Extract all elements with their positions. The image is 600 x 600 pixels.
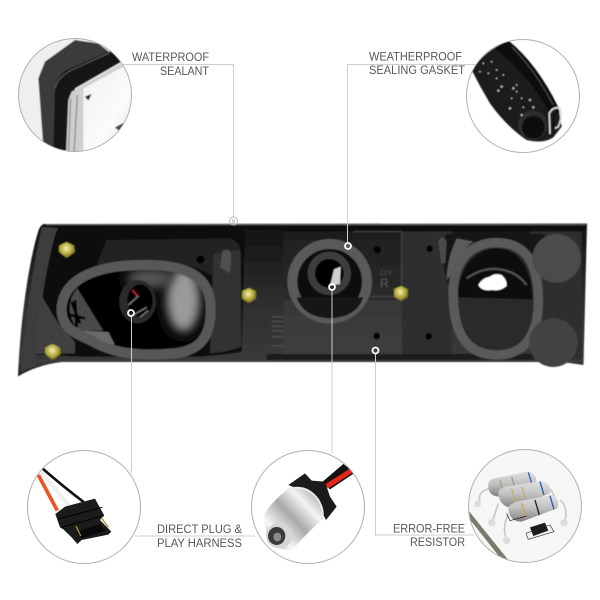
clip moulding — [438, 237, 447, 263]
bolt — [394, 286, 408, 301]
thumbnail border — [468, 450, 582, 562]
right of bowl panel — [210, 250, 241, 353]
thumbnail photo — [472, 41, 562, 141]
line: harness to bulb — [135, 535, 255, 537]
bolt — [59, 242, 75, 258]
label: PLAY HARNESS — [157, 538, 242, 550]
bowl lower band — [126, 344, 186, 349]
right reflector black zone — [458, 248, 532, 299]
voltage marking — [379, 268, 392, 290]
bolt — [242, 288, 256, 303]
line: resistor — [376, 354, 474, 535]
leader lines — [120, 64, 476, 536]
left side grey wall — [35, 293, 75, 354]
thumbnail border — [252, 450, 364, 564]
marker: sealant — [230, 217, 238, 225]
line: harness — [130, 316, 132, 473]
reflector soft highlights — [119, 270, 205, 349]
left lens edge highlight — [21, 227, 58, 372]
mounting holes — [373, 245, 433, 340]
12V mark: 12V — [379, 268, 392, 277]
thumbnail photo — [469, 450, 581, 562]
marker: bulb socket — [329, 284, 335, 290]
right reflector highlight — [447, 238, 473, 280]
centre socket — [311, 255, 347, 291]
left bulb socket shadow — [119, 280, 156, 323]
centre gasket — [292, 244, 367, 319]
housing outer body — [18, 224, 587, 376]
centre bulb glint — [330, 267, 341, 286]
marker: harness — [128, 310, 134, 316]
callout: error-free resistor — [393, 447, 583, 567]
brass bolts — [45, 242, 408, 360]
thumbnail photo — [264, 464, 355, 550]
marker rings — [128, 217, 378, 354]
label: SEALANT — [160, 66, 209, 78]
line: weatherproof gasket — [348, 64, 476, 243]
label: DIRECT PLUG & — [157, 524, 242, 536]
label: ERROR-FREE — [393, 524, 465, 536]
callout: direct plug and play harness — [28, 450, 242, 564]
R mark: R — [380, 276, 389, 290]
callout: weatherproof sealing gasket — [369, 40, 580, 152]
line: waterproof sealant — [120, 64, 234, 217]
bowl top glow — [127, 268, 173, 288]
thumbnail photo — [17, 37, 133, 153]
left socket wire detail — [132, 290, 139, 297]
right end panel — [530, 231, 582, 359]
tail light housing — [18, 224, 587, 376]
left dark recess — [35, 231, 245, 357]
moulded clip — [220, 250, 231, 273]
thumbnail photo — [38, 469, 111, 544]
panel seam — [353, 232, 402, 297]
thumbnail border — [18, 38, 132, 152]
right gasket — [453, 243, 538, 355]
thumbnail border — [466, 40, 580, 152]
lower grey lip — [82, 331, 115, 345]
left lower-left grey wedge — [70, 288, 103, 331]
top dark band — [283, 227, 583, 231]
left wiring clip — [70, 300, 85, 327]
centre lower shadow — [297, 297, 363, 318]
marker: gasket — [345, 243, 351, 249]
bolt — [45, 344, 61, 360]
embossed text block — [272, 316, 297, 347]
rubber cap top — [532, 234, 581, 283]
right of centre panel — [402, 231, 452, 356]
left inner cavity — [35, 231, 297, 357]
right reflector shell — [443, 234, 545, 290]
rubber cap bottom — [529, 318, 578, 367]
line: bulb socket — [331, 290, 333, 453]
label: WATERPROOF — [132, 52, 209, 64]
mounting hole — [196, 255, 204, 263]
bowl right glow — [167, 268, 200, 332]
thumbnail border — [28, 450, 140, 564]
label: RESISTOR — [410, 537, 465, 549]
bottom dark band — [267, 354, 533, 360]
label: WEATHERPROOF — [369, 52, 462, 64]
left gasket ring — [62, 265, 211, 355]
left socket contacts — [128, 296, 148, 317]
label: SEALING GASKET — [369, 65, 465, 77]
callout: bulb socket — [252, 450, 364, 564]
top edge highlight — [46, 224, 586, 226]
left reflector bowl — [62, 265, 211, 355]
marker: resistor — [372, 348, 378, 354]
centre and right cavity — [267, 227, 583, 367]
right reflector gloss — [467, 269, 527, 285]
centre dark block — [283, 231, 402, 356]
left bulb socket hole — [127, 285, 153, 317]
upper recess glow — [97, 238, 241, 287]
right lens opening — [478, 274, 507, 290]
callout: waterproof sealant — [17, 37, 209, 153]
